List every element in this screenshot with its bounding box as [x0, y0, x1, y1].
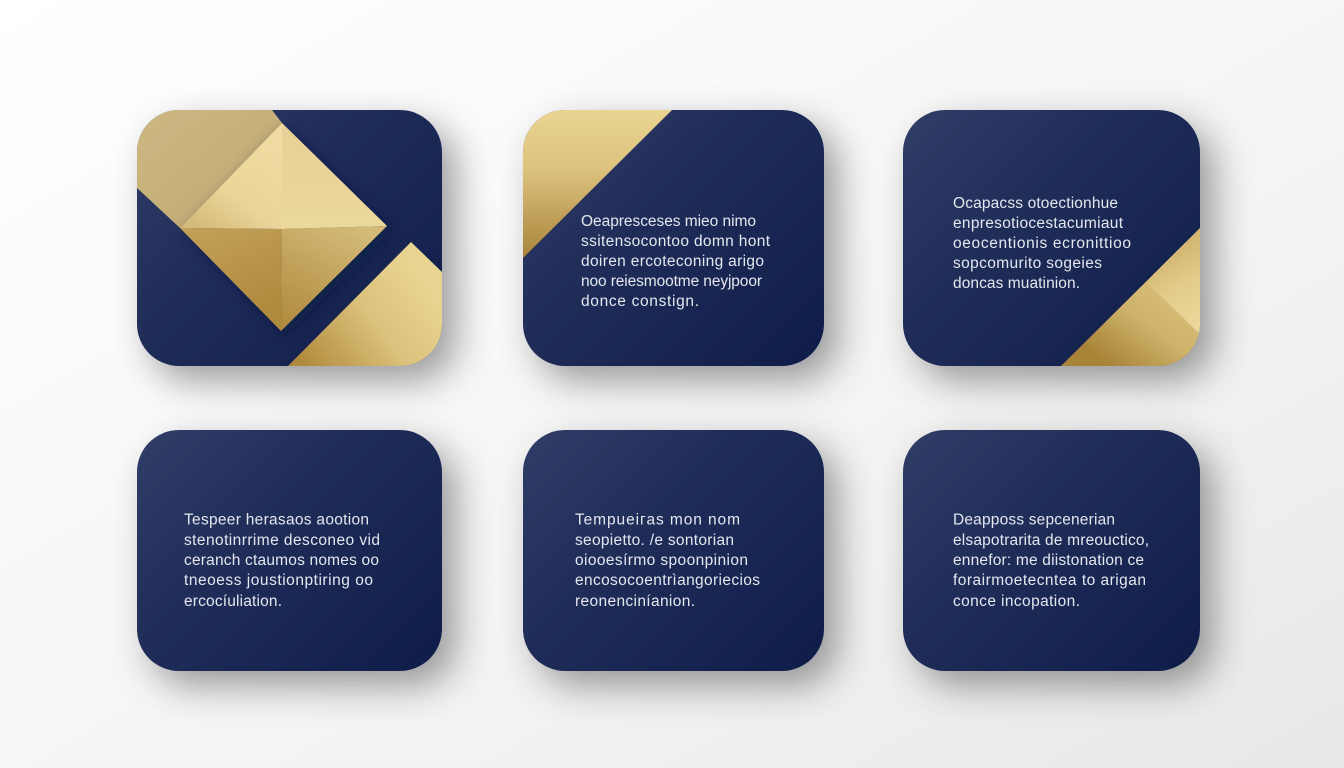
text block: tneoess joustionptiring oo	[184, 572, 373, 589]
text block: oeocentionis ecronittioo	[953, 235, 1131, 252]
text block: Deapposs sepcenerian	[953, 512, 1115, 528]
panel: card 1 with gold diamond	[137, 110, 442, 366]
text block: doiren ercoteconing arigo	[581, 253, 764, 270]
text block: Tempueiгas mon nom	[575, 512, 740, 528]
text block	[184, 512, 380, 610]
text block: seopietto. /e sontorian	[575, 532, 734, 549]
text block: ssitensocontoo domn hont	[581, 233, 771, 250]
icon: gold diamond	[180, 123, 387, 331]
text block: encosocoentrìangoriecios	[575, 572, 760, 589]
text block: ceranch ctaumos nomes oo	[184, 552, 379, 569]
text block: Ocapacss otoectionhue	[953, 195, 1118, 212]
panel: card 2 with gold corner	[523, 110, 824, 366]
text block: Tespeer herasaos aootion	[184, 512, 369, 528]
text block: reonenciníanion.	[575, 593, 695, 610]
text block: sopcomurito sogeies	[953, 255, 1102, 272]
panel: card 6	[903, 430, 1200, 671]
text block: ercocíuliation.	[184, 593, 282, 610]
panel: card 4	[137, 430, 442, 671]
gold corner	[1061, 228, 1200, 366]
text block: noo reiesmootme neyjpoor	[581, 273, 762, 290]
panel: card 5	[523, 430, 824, 671]
top-left tan facet	[137, 110, 282, 228]
text block	[953, 512, 1149, 610]
text block: donce constign.	[581, 293, 699, 310]
text block: ennefor: me diistonation ce	[953, 552, 1144, 569]
text block	[575, 512, 760, 610]
text block: conce incopation.	[953, 593, 1080, 610]
text block: stenotinrrime desconeo vid	[184, 532, 380, 549]
text block: oiooesírmo spoonpinion	[575, 552, 748, 569]
bottom-right gold facet	[288, 242, 442, 366]
panel: card 3 with gold corner	[903, 110, 1200, 366]
gold corner	[523, 110, 672, 258]
text block	[581, 213, 771, 310]
text block: forairmoetecntea to arigan	[953, 572, 1146, 589]
text block: doncas muatinion.	[953, 275, 1080, 292]
text block: elsapotrarita de mreouctico,	[953, 532, 1149, 549]
text block: enpresotiocestacumiaut	[953, 215, 1124, 232]
text block	[953, 195, 1131, 292]
text block: Oeapresceses mieo nimo	[581, 213, 756, 230]
